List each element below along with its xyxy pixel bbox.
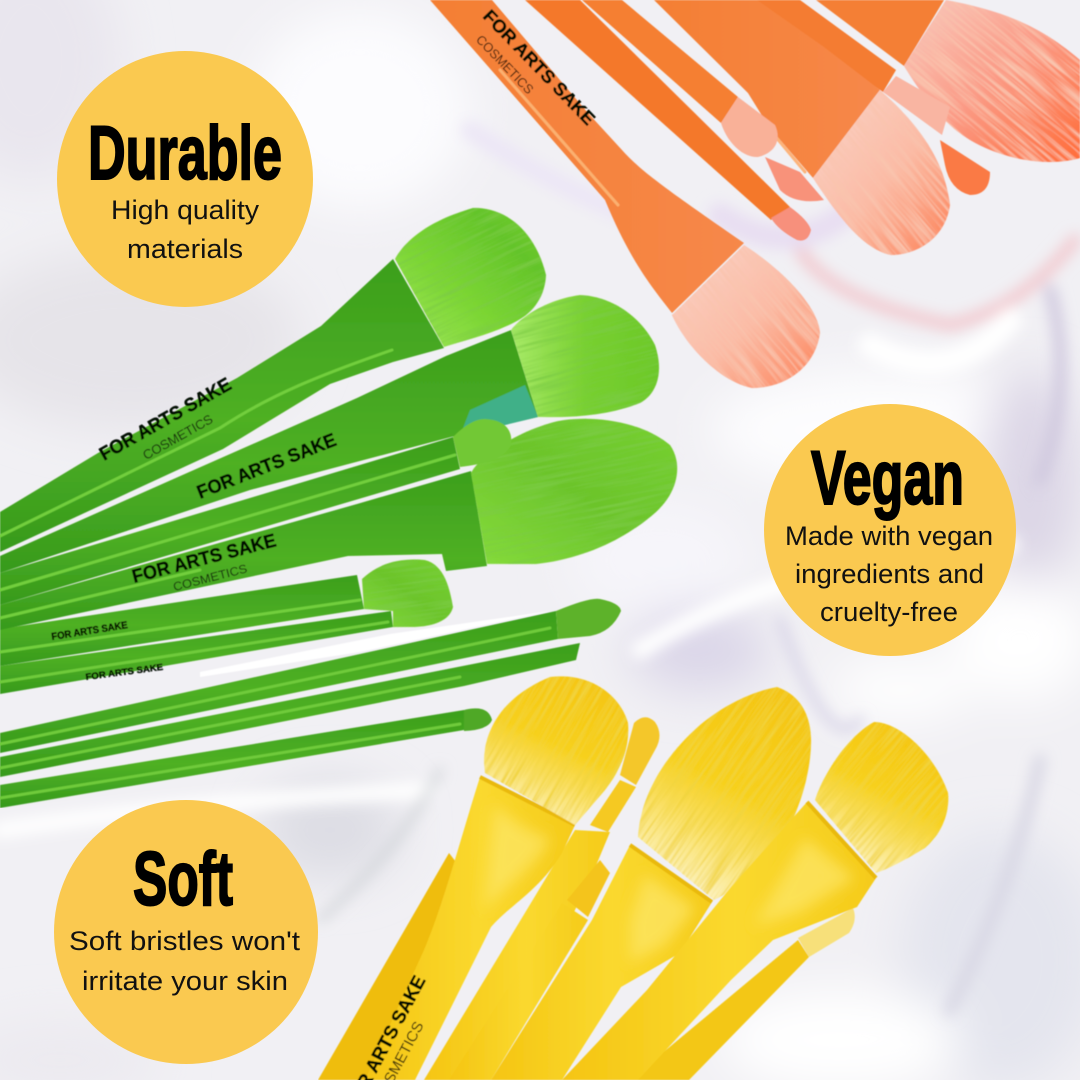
text: Soft bristles won't irritate your skin: irritate your skin: [82, 966, 288, 996]
green brush 4 large: [0, 377, 707, 630]
green brush 1: FOR ARTS SAKE: [96, 374, 235, 465]
satin fold between green brushes: [200, 611, 550, 677]
green brush 3 small: [0, 419, 511, 605]
green brush 8: [0, 643, 580, 777]
orange blob behind: [765, 157, 824, 201]
text: Made with vegan ingredients and cruelty-free: Made with vegan: [785, 521, 993, 551]
orange brush far right: [816, 0, 1080, 249]
heading: Soft: Soft: [133, 837, 233, 922]
orange brushes: [430, 0, 1080, 461]
green brush 7: [0, 599, 621, 753]
brand label orange: COSMETICS: [473, 32, 537, 97]
yellow brushes: [318, 606, 1023, 1080]
green brush 1: [0, 150, 599, 552]
text: High quality materials: [111, 195, 260, 264]
orange brush small tip under: [940, 140, 990, 195]
green brush 2: FOR ARTS SAKE: [194, 430, 340, 504]
green brush 5: FOR ARTS SAKE: [51, 620, 129, 643]
text: Soft bristles won't irritate your skin: [69, 926, 301, 996]
orange brush main with logo: [430, 0, 890, 461]
yellow brush short tip middle: [449, 860, 610, 1080]
green brush 6: FOR ARTS SAKE: [85, 662, 164, 682]
badge: Durable: [57, 51, 313, 307]
orange brush small round: [582, 0, 778, 157]
green brushes: [0, 150, 707, 808]
yellow brush thin lower right: [630, 908, 855, 1080]
yellow brush right: [562, 656, 1023, 1080]
yellow brush thin back left: [318, 853, 470, 1080]
text: Made with vegan ingredients and cruelty-free: ingredients and: [795, 559, 984, 589]
green brush 2: [0, 258, 690, 573]
heading: Vegan: Vegan: [811, 436, 964, 521]
text: Made with vegan ingredients and cruelty-free: [785, 521, 993, 627]
green brush 1: COSMETICS: [140, 411, 216, 463]
green brush 4 large: FOR ARTS SAKE: [130, 530, 279, 588]
green brush 4 large: COSMETICS: [172, 561, 249, 594]
yellow brush main with logo: [341, 614, 693, 1080]
green brush 9: [0, 708, 492, 808]
text: High quality materials: materials: [127, 234, 243, 264]
text: High quality materials: High quality: [111, 195, 260, 225]
heading: Durable: Durable: [88, 111, 282, 196]
yellow brush centre: [491, 606, 911, 1080]
badge: Soft: [54, 800, 318, 1064]
orange brush thin with tip: [525, 0, 811, 241]
brand label orange: FOR ARTS SAKE: [479, 6, 599, 129]
green brush 5: [0, 547, 462, 666]
text: Made with vegan ingredients and cruelty-free: cruelty-free: [820, 597, 958, 627]
badge: Vegan: [764, 404, 1016, 656]
orange brush large flat: [654, 0, 1031, 322]
yellow brush small tip top: [424, 717, 660, 1080]
text: Soft bristles won't irritate your skin: Soft bristles won't: [69, 926, 301, 956]
green brush 6: [0, 611, 393, 694]
orange brush with pink band: [750, 0, 950, 135]
